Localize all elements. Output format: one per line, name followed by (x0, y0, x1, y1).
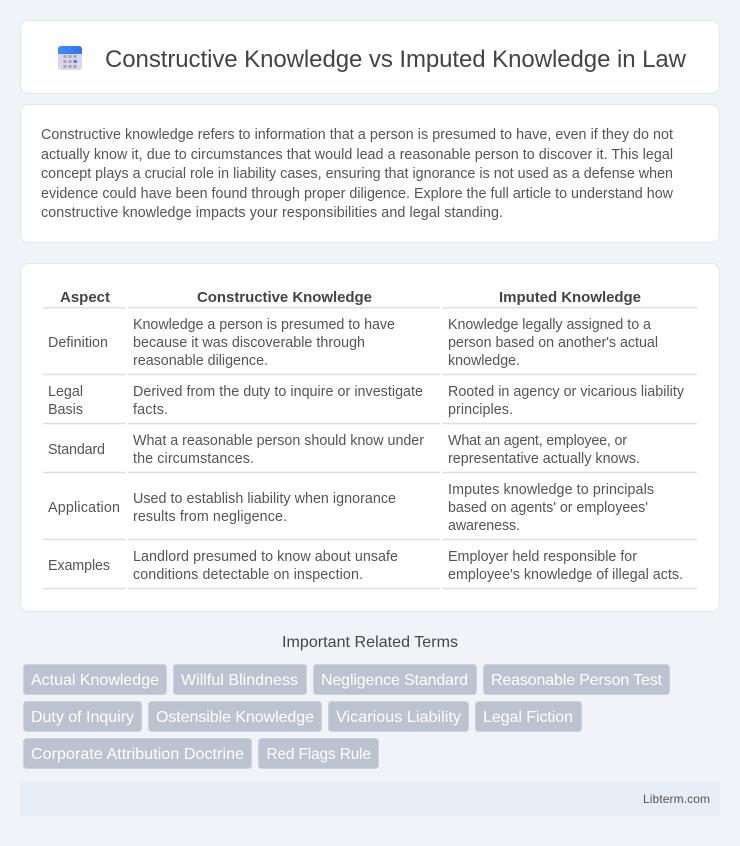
row: examples: Landlord presumed to know about unsafe (133, 549, 398, 565)
intro paragraph (41, 127, 674, 221)
related term chips: Negligence Standard (321, 672, 468, 689)
row: standard: Standard (48, 442, 105, 458)
row: standard: What a reasonable person should know under (133, 433, 424, 449)
table header: Aspect (60, 289, 110, 306)
table header: Constructive Knowledge (197, 289, 372, 306)
row: legal basis: principles. (448, 402, 513, 418)
table header: Imputed Knowledge (499, 289, 641, 306)
row: legal basis: Rooted in agency or vicarious liability (448, 384, 685, 400)
row: definition: because it was discoverable through (133, 335, 365, 351)
related term chips: Actual Knowledge (31, 672, 159, 689)
row: examples: Examples (48, 558, 110, 574)
panel: comparison table (20, 264, 720, 612)
row: application (48, 482, 654, 534)
row: standard: What an agent, employee, or (448, 433, 627, 449)
panel: introduction (20, 104, 720, 242)
row: definition (48, 317, 658, 369)
icon: calendar (58, 46, 82, 70)
row: application: awareness. (448, 518, 520, 534)
row: application: results from negligence. (133, 509, 287, 525)
row: legal basis: Derived from the duty to inquire or investigate (133, 384, 423, 400)
row: application: Application (48, 500, 120, 516)
heading: related terms: Important Related Terms (282, 634, 458, 651)
row: application: based on agents' or employees' (448, 500, 648, 516)
row: standard: the circumstances. (133, 451, 254, 467)
row: definition: Knowledge legally assigned to a (448, 317, 651, 333)
related term chips: Corporate Attribution Doctrine (31, 746, 244, 763)
row: legal basis: facts. (133, 402, 168, 418)
row: definition: Knowledge a person is presumed to have (133, 317, 395, 333)
related term chips: Duty of Inquiry (31, 709, 134, 726)
row: definition: person based on another's actual (448, 335, 658, 351)
table header (60, 289, 641, 306)
row: application: Imputes knowledge to principals (448, 482, 654, 498)
row: definition: reasonable diligence. (133, 353, 268, 369)
row: examples: employee's knowledge of illegal acts. (448, 567, 683, 583)
intro paragraph: Constructive knowledge refers to information that a person is presumed to have, even if they do not (41, 127, 673, 143)
row: examples (48, 549, 683, 583)
panel: title header (20, 20, 720, 94)
footer bar (20, 782, 720, 816)
related term chips: Vicarious Liability (336, 709, 461, 726)
related term chips (24, 664, 670, 768)
row: legal basis: Basis (48, 402, 83, 418)
intro paragraph: actually know it, due to circumstances that would lead a reasonable person to discover it. This legal (41, 147, 673, 163)
related term chips: Red Flags Rule (266, 746, 371, 763)
row: standard (48, 433, 640, 467)
intro paragraph: evidence could have been found through proper diligence. Explore the full article to understand how (41, 186, 674, 202)
intro paragraph: constructive knowledge impacts your responsibilities and legal standing. (41, 205, 503, 221)
row: definition: knowledge. (448, 353, 520, 369)
row: definition: Definition (48, 335, 108, 351)
related term chips: Legal Fiction (483, 709, 573, 726)
row: legal basis (48, 384, 685, 418)
related term chips: Ostensible Knowledge (156, 709, 314, 726)
footer credit: Libterm.com (643, 792, 710, 806)
related term chips: Reasonable Person Test (491, 672, 663, 689)
title: Constructive Knowledge vs Imputed Knowledge in Law (105, 46, 687, 73)
related term chips: Willful Blindness (181, 672, 298, 689)
row: standard: representative actually knows. (448, 451, 640, 467)
row: application: Used to establish liability when ignorance (133, 491, 396, 507)
row: examples: Employer held responsible for (448, 549, 637, 565)
intro paragraph: concept plays a crucial role in liability cases, ensuring that ignorance is not used as a defense when (41, 166, 673, 182)
row: legal basis: Legal (48, 384, 83, 400)
row: examples: conditions detectable on inspection. (133, 567, 363, 583)
